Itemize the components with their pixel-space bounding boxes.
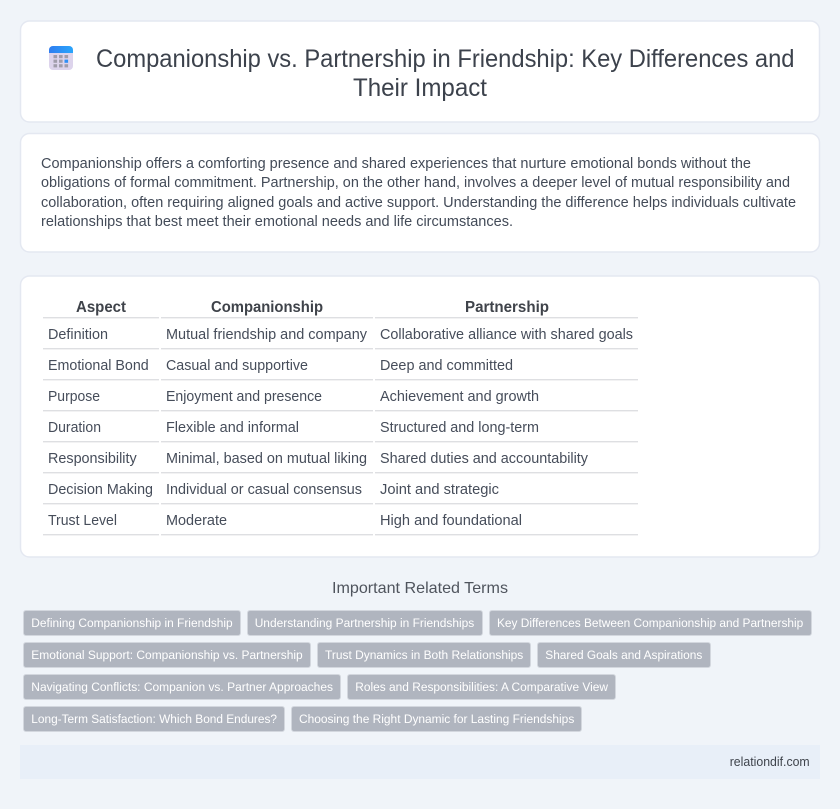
table row: trust level: Trust Level [48, 513, 117, 529]
tag [538, 642, 710, 668]
table row: trust level [48, 513, 522, 529]
icon: calendar [49, 46, 73, 70]
tag [24, 706, 284, 732]
table header row: Aspect [76, 299, 126, 316]
text block: introduction paragraph [41, 156, 796, 230]
table row: purpose: Achievement and growth [380, 389, 539, 405]
text block: introduction paragraph: obligations of formal commitment. Partnership, on the other hand, involves a deeper level of mutual responsibility and [41, 175, 790, 191]
table row: duration [48, 420, 539, 436]
table row: decision making: Joint and strategic [380, 482, 499, 498]
title: Companionship vs. Partnership in Friendship: Key Differences and [96, 45, 794, 73]
text block: introduction paragraph: Companionship offers a comforting presence and shared experiences that nurture emotional bonds without the [41, 156, 751, 172]
tag: Key Differences Between Companionship and Partnership [497, 616, 803, 630]
table row: responsibility: Shared duties and accountability [380, 451, 589, 467]
table header row [76, 299, 549, 316]
table row: purpose: Purpose [48, 389, 100, 405]
tag [24, 642, 310, 668]
table row: emotional bond [48, 358, 513, 374]
table row: decision making: Individual or casual consensus [166, 482, 362, 498]
tag [292, 706, 582, 732]
tag: Long-Term Satisfaction: Which Bond Endures? [31, 712, 277, 726]
footer source text: relationdif.com [730, 755, 810, 769]
table row: emotional bond: Casual and supportive [166, 358, 308, 374]
tag [248, 610, 482, 636]
table header row: Companionship [211, 299, 323, 316]
tag [348, 674, 616, 700]
table header row: Partnership [465, 299, 549, 316]
table row: definition: Definition [48, 327, 108, 343]
table row: trust level: Moderate [166, 513, 227, 529]
table row: purpose [48, 389, 539, 405]
panel: comparison table [20, 276, 820, 557]
tag: Choosing the Right Dynamic for Lasting Friendships [299, 712, 574, 726]
tag: Roles and Responsibilities: A Comparative View [355, 680, 608, 694]
table row: purpose: Enjoyment and presence [166, 389, 322, 405]
heading: important related terms: Important Related Terms [332, 580, 508, 597]
table row: definition: Collaborative alliance with shared goals [380, 327, 633, 343]
table row: responsibility [48, 451, 589, 467]
tag [318, 642, 530, 668]
footer [20, 745, 820, 779]
title: Their Impact [353, 74, 487, 102]
text block: introduction paragraph: relationships that best meet their emotional needs and life circumstances. [41, 214, 513, 230]
table row: duration: Structured and long-term [380, 420, 539, 436]
tag: Navigating Conflicts: Companion vs. Partner Approaches [31, 680, 333, 694]
tag [24, 610, 240, 636]
table row: definition [48, 327, 633, 343]
tag: Trust Dynamics in Both Relationships [325, 648, 523, 662]
text block: introduction paragraph: collaboration, often requiring aligned goals and active support. Understanding the difference helps individuals cultivate [41, 195, 796, 211]
table row: decision making [48, 482, 499, 498]
title [96, 45, 794, 102]
table row: emotional bond: Deep and committed [380, 358, 513, 374]
table row: emotional bond: Emotional Bond [48, 358, 149, 374]
table row: responsibility: Minimal, based on mutual liking [166, 451, 367, 467]
panel: related term tags [24, 610, 812, 732]
table row: responsibility: Responsibility [48, 451, 137, 467]
tag: Understanding Partnership in Friendships [255, 616, 474, 630]
table row: decision making: Decision Making [48, 482, 153, 498]
panel: introduction [20, 134, 820, 252]
tag: Emotional Support: Companionship vs. Partnership [31, 648, 303, 662]
table row: trust level: High and foundational [380, 513, 522, 529]
panel: header [20, 21, 820, 122]
tag: Defining Companionship in Friendship [31, 616, 233, 630]
table row: definition: Mutual friendship and company [166, 327, 368, 343]
table row: duration: Flexible and informal [166, 420, 299, 436]
tag [490, 610, 812, 636]
tag: Shared Goals and Aspirations [545, 648, 702, 662]
tag [24, 674, 340, 700]
table row: duration: Duration [48, 420, 101, 436]
